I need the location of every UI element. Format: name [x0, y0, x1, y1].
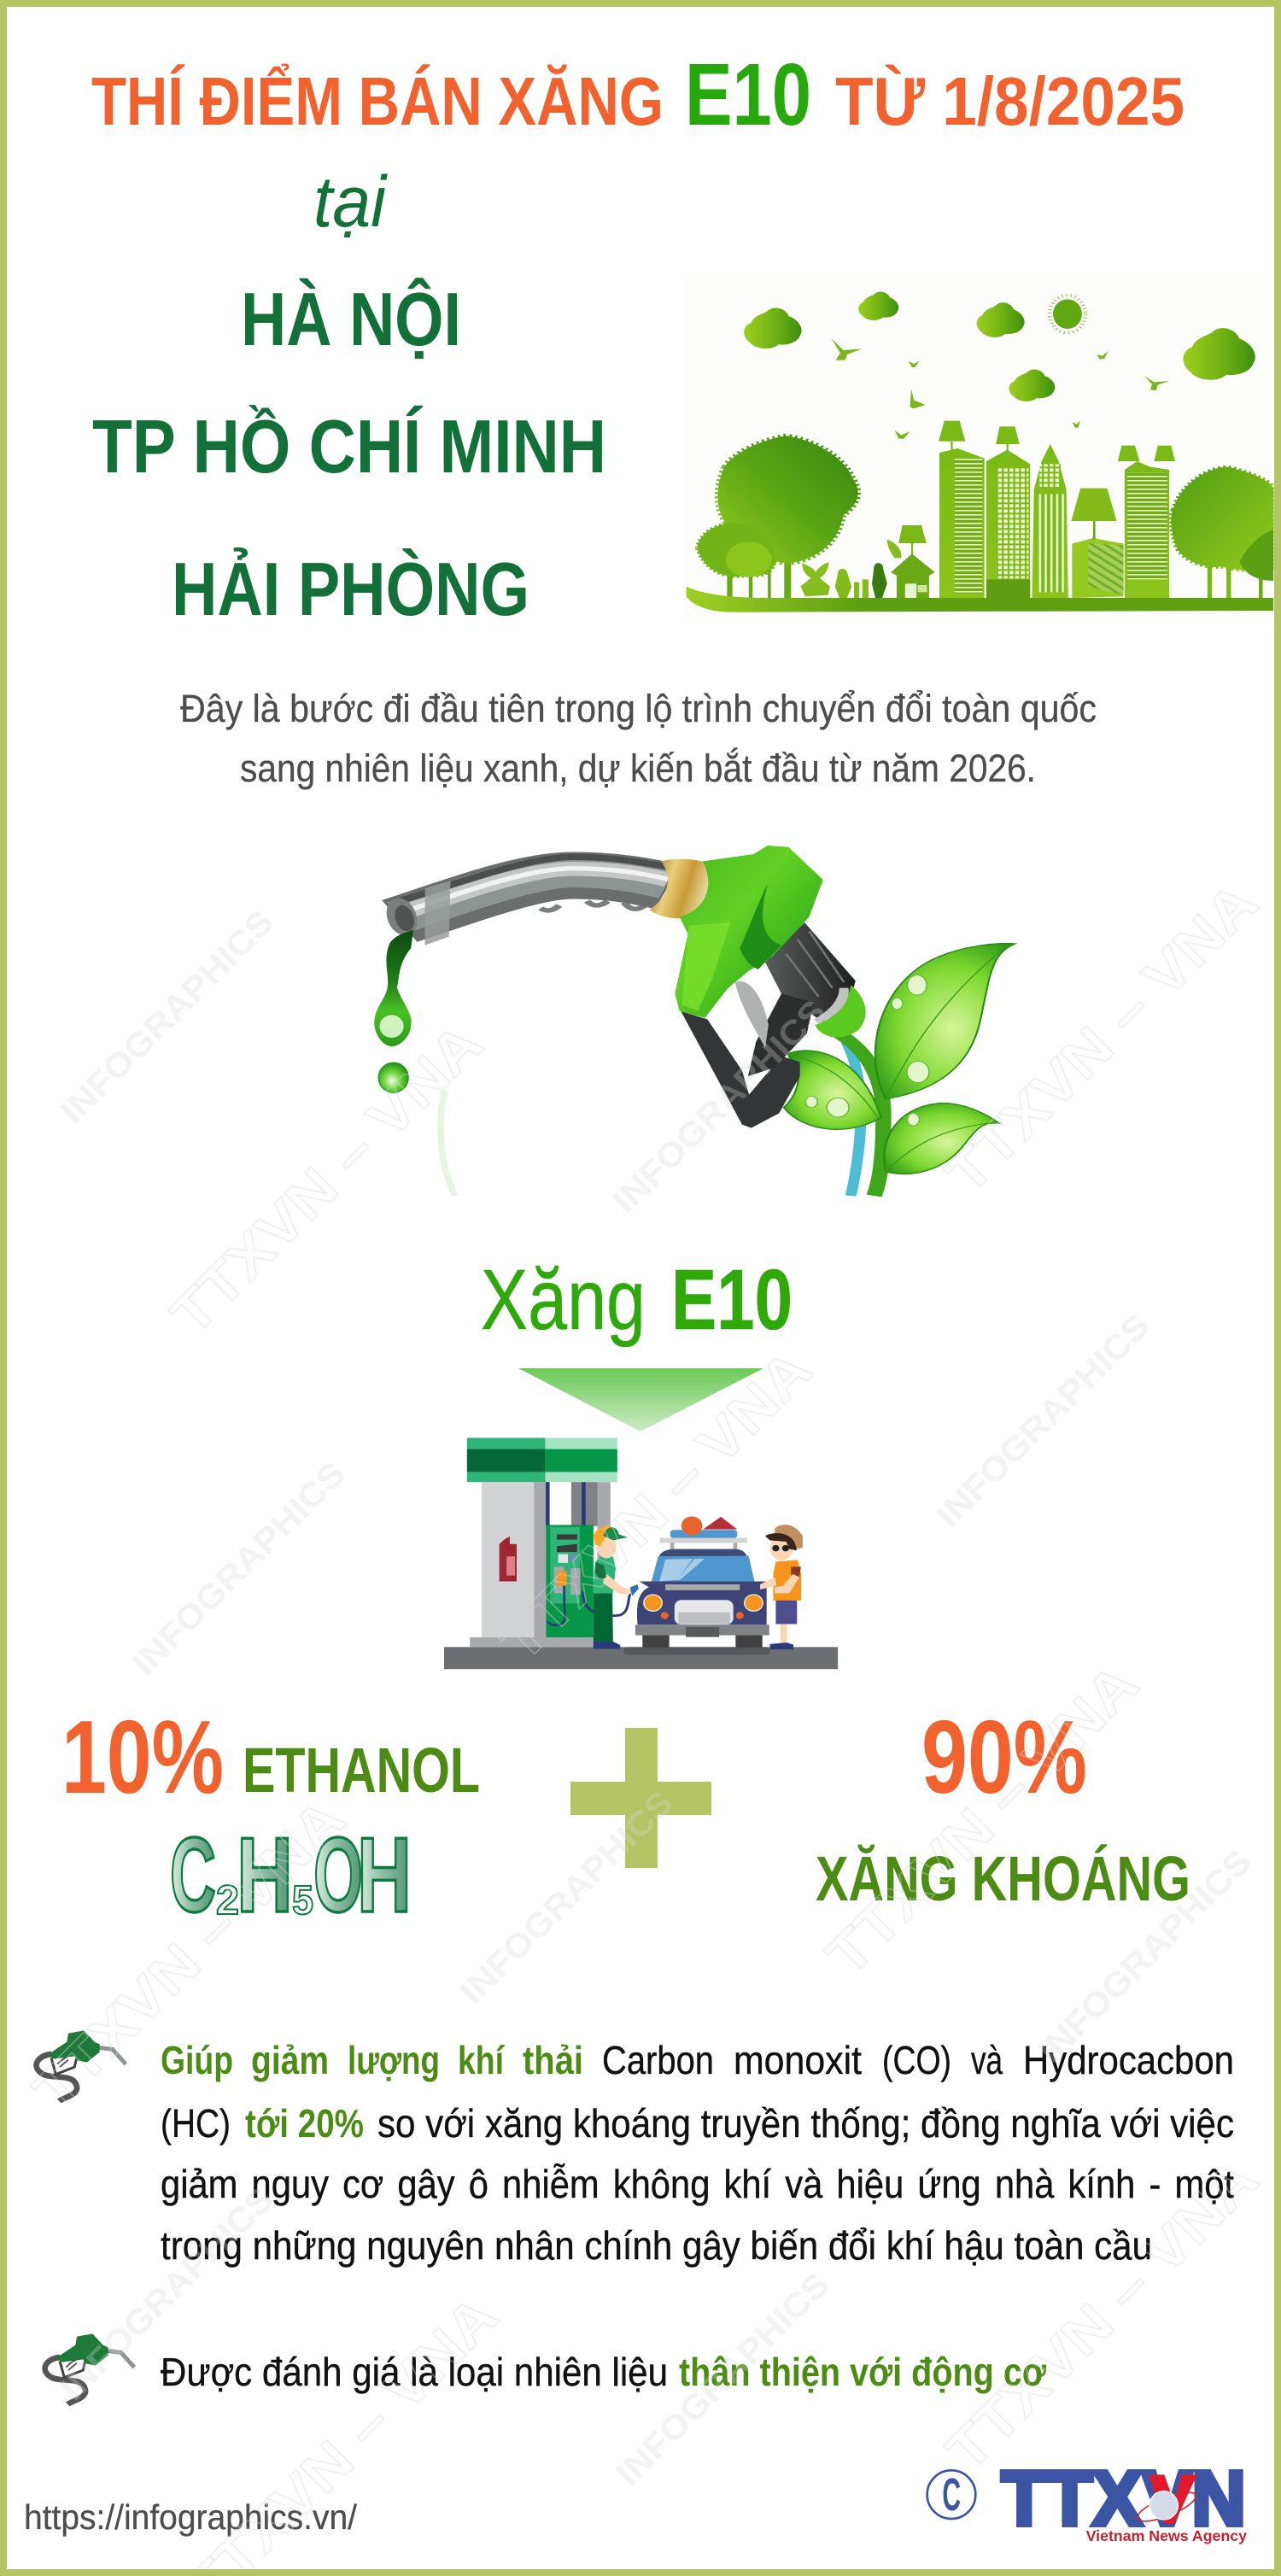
watermarks: TTXVN – VNA: [814, 1651, 1150, 1988]
benefit text 1: lượng: [348, 2038, 440, 2082]
watermarks: INFOGRAPHICS: [453, 1783, 681, 2011]
heading: Xăng E10: Xăng: [481, 1252, 646, 1348]
water droplets: [805, 975, 929, 1126]
agency name: Vietnam News Agency: [1086, 2527, 1247, 2544]
intro text: sang nhiên liệu xanh, dự kiến bắt đầu từ năm 2026.: [240, 746, 1036, 790]
watermarks: [20, 869, 1270, 2576]
arrow: down triangle: [518, 1368, 763, 1431]
benefit text 2: [161, 2350, 1046, 2394]
ground: [444, 1647, 838, 1669]
stat: 10% ethanol: ETHANOL: [243, 1735, 480, 1806]
watermarks: TTXVN – VNA: [20, 1786, 357, 2122]
benefit text 1: monoxit: [734, 2038, 862, 2082]
falling drop: [378, 1063, 408, 1092]
benefit text 1: và: [971, 2038, 1003, 2082]
illustration: green city: [683, 273, 1274, 624]
house: [887, 525, 935, 598]
chemical formula: C: [170, 1817, 216, 1935]
benefit text 1: (HC): [161, 2101, 231, 2146]
copyright mark: [927, 2470, 975, 2520]
right trees: [1171, 467, 1273, 598]
chemical formula: H: [357, 1817, 412, 1935]
benefit text 1: thải: [523, 2038, 583, 2082]
handle: [765, 922, 856, 1022]
icon: pump nozzle 1: [37, 2030, 126, 2101]
watermarks: INFOGRAPHICS: [929, 1307, 1157, 1535]
fuel pump: [546, 1525, 630, 1637]
watermarks: TTXVN – VNA: [158, 1010, 494, 1347]
city names: HÀ NỘI: [241, 277, 461, 361]
family and car: [800, 562, 887, 598]
icon: pump nozzle 2: [45, 2333, 134, 2404]
watermarks: INFOGRAPHICS: [609, 2265, 837, 2493]
rooftop lamps: [939, 421, 1175, 461]
brass collar: [649, 859, 711, 918]
stat: 10% ethanol: [61, 1699, 480, 1815]
watermarks: INFOGRAPHICS: [125, 1455, 353, 1683]
copyright mark: C: [942, 2470, 961, 2520]
title line: E10: [685, 45, 811, 143]
watermarks: INFOGRAPHICS: [53, 2180, 281, 2408]
subheading: tại: tại: [313, 161, 388, 242]
green body: [675, 846, 823, 1018]
trigger guard: [681, 1011, 800, 1128]
benefit text 1: trong những nguyên nhân chính gây biến đổi khí hậu toàn cầu: [161, 2223, 1152, 2268]
benefit text 1: Giúp: [161, 2038, 233, 2082]
plus sign: [570, 1728, 711, 1868]
buildings: [939, 444, 1169, 598]
city names: HẢI PHÒNG: [172, 547, 529, 631]
benefit text 1: Hydrocacbon: [1023, 2038, 1234, 2082]
illustration: fuel station: [444, 1437, 838, 1669]
building: [482, 1482, 534, 1637]
intro text: [180, 687, 1097, 790]
car: [635, 1516, 769, 1648]
benefit text 1: [161, 2038, 1234, 2268]
heading: Xăng E10: [481, 1252, 793, 1348]
stem: [828, 1027, 883, 1196]
heading: Xăng E10: E10: [671, 1252, 793, 1348]
fire extinguisher: [500, 1537, 517, 1582]
canopy: [467, 1437, 617, 1482]
logo: TTXVN: [927, 2456, 1247, 2544]
benefit text 1: khí: [458, 2038, 506, 2082]
title line: THÍ ĐIỂM BÁN XĂNG: [91, 63, 664, 139]
stat: 90% mineral gasoline: 90%: [921, 1699, 1087, 1815]
leaves: [784, 944, 1015, 1174]
pipe: [400, 857, 668, 921]
illustration: green fuel nozzle with leaves: [374, 846, 1015, 1196]
wordmark: TTXVN: [1002, 2456, 1246, 2542]
driver: [760, 1525, 803, 1649]
drip: [374, 929, 413, 1046]
watermarks: TTXVN – VNA: [488, 1337, 824, 1673]
chemical formula: 2: [216, 1878, 239, 1923]
red V and globe: [1134, 2474, 1199, 2527]
chemical formula: H: [237, 1817, 293, 1935]
hose ring: [815, 985, 866, 1037]
blue hose: [846, 1042, 861, 1196]
benefit text 1: (CO): [882, 2038, 951, 2082]
benefit text 1: giảm: [251, 2038, 329, 2082]
watermarks: INFOGRAPHICS: [1031, 1842, 1259, 2070]
stat: 90% mineral gasoline: [816, 1699, 1190, 1914]
benefit text 1: tới 20%: [245, 2101, 364, 2146]
benefit text 2: thân thiện với động cơ: [679, 2350, 1046, 2394]
birds: [831, 338, 1169, 439]
stat: 10% ethanol: 10%: [61, 1699, 224, 1815]
sun: [1050, 296, 1085, 333]
benefit text 2: Được đánh giá là loại nhiên liệu: [161, 2350, 668, 2394]
chemical formula: O: [313, 1817, 363, 1935]
clouds: [744, 291, 1255, 401]
source url: https://infographics.vn/: [24, 2497, 358, 2537]
faint stream: [441, 1091, 455, 1196]
watermarks: TTXVN – VNA: [933, 869, 1270, 1206]
title line: [91, 45, 1184, 143]
attendant: [593, 1526, 639, 1648]
benefit text 1: Carbon: [602, 2038, 714, 2082]
city names: TP HỒ CHÍ MINH: [92, 404, 606, 489]
watermarks: TTXVN – VNA: [933, 2146, 1270, 2483]
left trees: [697, 436, 858, 598]
chemical formula: 5: [292, 1878, 313, 1923]
title line: TỪ 1/8/2025: [835, 63, 1184, 139]
watermarks: INFOGRAPHICS: [53, 903, 281, 1131]
city names: [92, 277, 606, 631]
watermarks: INFOGRAPHICS: [605, 992, 834, 1221]
intro text: Đây là bước đi đầu tiên trong lộ trình chuyển đổi toàn quốc: [180, 687, 1097, 730]
ground: [687, 587, 1273, 612]
chemical formula: [170, 1817, 412, 1935]
